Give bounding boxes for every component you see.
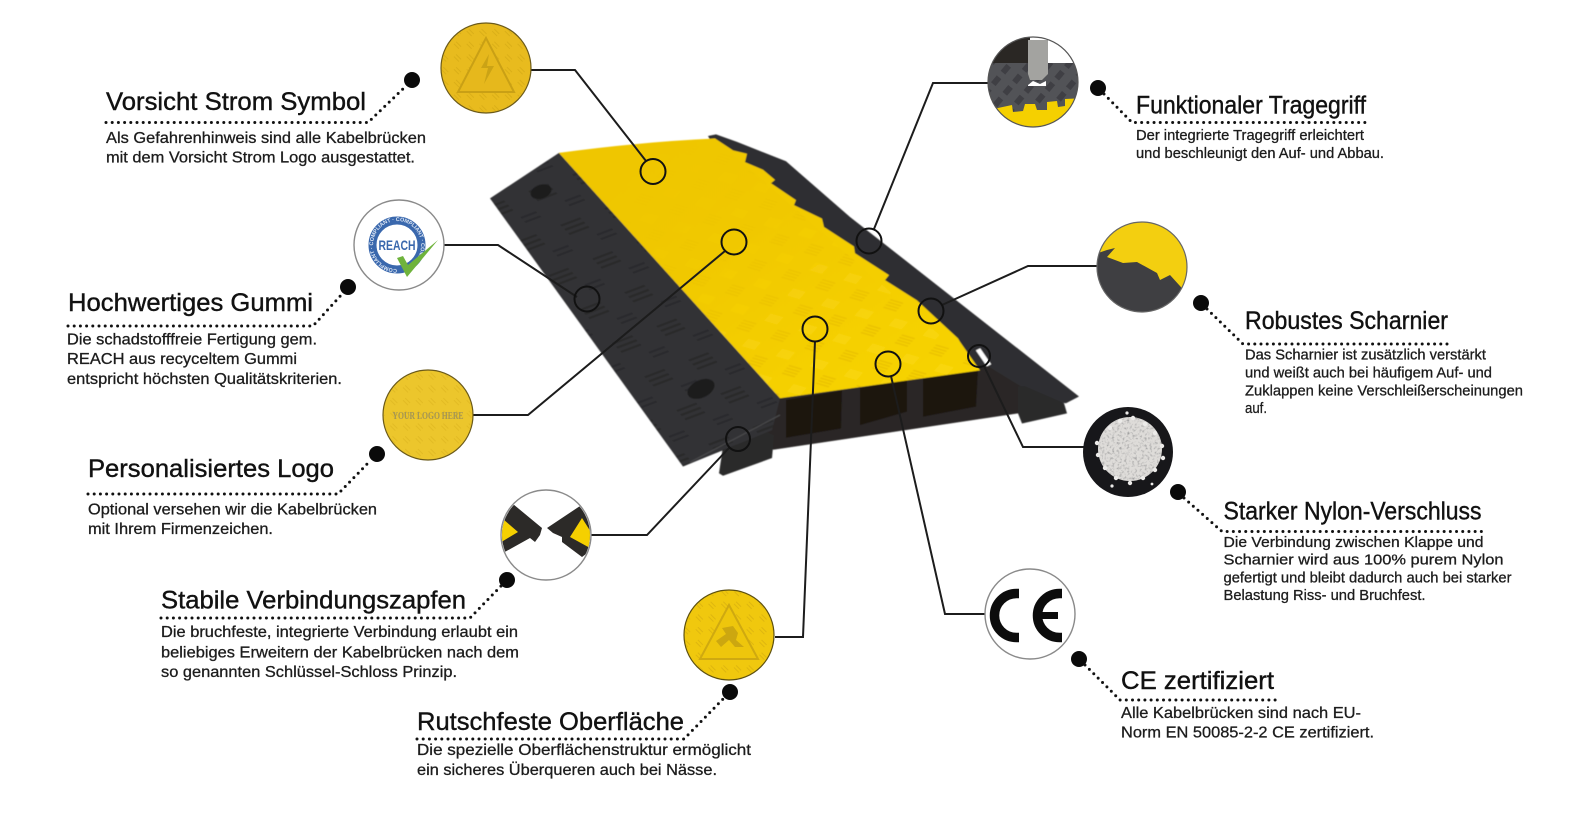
callout: Funktionaler Tragegriff: und beschleunigt den Auf- und Abbau. bbox=[1136, 145, 1384, 162]
callout: Starker Nylon-Verschluss: Scharnier wird aus 100% purem Nylon bbox=[1224, 552, 1504, 568]
callout: CE zertifiziert bbox=[1071, 651, 1374, 742]
callout: Robustes Scharnier: Das Scharnier ist zusätzlich verstärkt bbox=[1245, 346, 1487, 364]
callout: CE zertifiziert: Alle Kabelbrücken sind nach EU- bbox=[1121, 705, 1361, 722]
icon: personalised logo plate: YOUR LOGO HERE bbox=[392, 411, 464, 422]
callout: Vorsicht Strom Symbol: Als Gefahrenhinweis sind alle Kabelbrücken bbox=[106, 130, 426, 147]
far side ramp bbox=[708, 134, 1079, 403]
callout: Rutschfeste Oberfläche: Rutschfeste Oberfläche bbox=[417, 708, 684, 736]
callout: CE zertifiziert: Norm EN 50085-2-2 CE zertifiziert. bbox=[1121, 724, 1374, 742]
yellow cover plate bbox=[559, 139, 980, 398]
callout: Robustes Scharnier: Zuklappen keine Verschleißerscheinungen bbox=[1245, 382, 1523, 400]
callout: Starker Nylon-Verschluss: Belastung Riss- und Bruchfest. bbox=[1224, 587, 1426, 604]
leader: Vorsicht Strom Symbol bbox=[522, 70, 666, 184]
white nylon hinge pin bbox=[978, 349, 989, 365]
callout: Funktionaler Tragegriff bbox=[1090, 80, 1384, 162]
callout: Vorsicht Strom Symbol: mit dem Vorsicht Strom Logo ausgestattet. bbox=[106, 150, 415, 166]
icon: REACH compliant seal bbox=[353, 199, 445, 291]
left connector peg bbox=[719, 427, 774, 476]
icon: REACH compliant seal: REACH bbox=[378, 237, 416, 253]
callout: Vorsicht Strom Symbol: Vorsicht Strom Symbol bbox=[106, 88, 366, 116]
callout: Stabile Verbindungszapfen bbox=[161, 572, 519, 681]
callout: Funktionaler Tragegriff: Der integrierte Tragegriff erleichtert bbox=[1136, 127, 1365, 144]
leader: Funktionaler Tragegriff bbox=[856, 83, 988, 254]
leader: Personalisiertes Logo bbox=[472, 230, 746, 415]
callout: Starker Nylon-Verschluss: Starker Nylon-Verschluss bbox=[1224, 498, 1482, 526]
callout: Funktionaler Tragegriff: Funktionaler Tragegriff bbox=[1136, 92, 1366, 120]
left ramp bbox=[490, 153, 780, 466]
callout: Stabile Verbindungszapfen: so genannten Schlüssel-Schloss Prinzip. bbox=[161, 664, 457, 681]
icon: electric warning symbol bbox=[441, 23, 531, 113]
leader: CE zertifiziert bbox=[876, 352, 985, 614]
callout: Hochwertiges Gummi: entspricht höchsten Qualitätskriterien. bbox=[67, 371, 342, 388]
callout: Personalisiertes Logo bbox=[88, 446, 385, 538]
icon: nylon granulate bbox=[1083, 407, 1173, 497]
callout: Rutschfeste Oberfläche: Die spezielle Oberflächenstruktur ermöglicht bbox=[417, 742, 752, 759]
callout: Stabile Verbindungszapfen: Stabile Verbindungszapfen bbox=[161, 586, 466, 614]
icon: connector pegs bbox=[498, 490, 594, 580]
callout: Stabile Verbindungszapfen: Die bruchfeste, integrierte Verbindung erlaubt ein bbox=[161, 624, 518, 641]
callout: Rutschfeste Oberfläche: ein sicheres Überqueren auch bei Nässe. bbox=[417, 761, 717, 779]
callout: Hochwertiges Gummi: REACH aus recyceltem Gummi bbox=[67, 351, 297, 368]
leader: Robustes Scharnier bbox=[918, 266, 1097, 324]
callout: Stabile Verbindungszapfen: beliebiges Erweitern der Kabelbrücken nach dem bbox=[161, 644, 519, 662]
leader: Stabile Verbindungszapfen bbox=[590, 427, 750, 535]
leader: Hochwertiges Gummi bbox=[444, 245, 600, 312]
callout: Personalisiertes Logo: Personalisiertes Logo bbox=[88, 455, 334, 483]
icon: carrying handle bbox=[987, 36, 1079, 128]
icon: CE mark bbox=[985, 569, 1075, 659]
callout: Hochwertiges Gummi: Die schadstofffreie Fertigung gem. bbox=[67, 332, 317, 348]
callout: Personalisiertes Logo: Optional versehen wir die Kabelbrücken bbox=[88, 502, 377, 518]
callout: Personalisiertes Logo: mit Ihrem Firmenzeichen. bbox=[88, 521, 273, 538]
callout: Starker Nylon-Verschluss: gefertigt und bleibt dadurch auch bei starker bbox=[1224, 570, 1512, 586]
callout: Hochwertiges Gummi bbox=[67, 279, 356, 388]
callout: Robustes Scharnier bbox=[1193, 295, 1523, 417]
callout: Robustes Scharnier: auf. bbox=[1245, 400, 1267, 417]
illustration: cable bridge product bbox=[490, 134, 1079, 476]
callout: Starker Nylon-Verschluss bbox=[1170, 484, 1512, 604]
right connector peg bbox=[1018, 386, 1067, 423]
callout: Rutschfeste Oberfläche bbox=[417, 684, 752, 779]
leader: Starker Nylon-Verschluss bbox=[968, 345, 1084, 447]
callout: Robustes Scharnier: Robustes Scharnier bbox=[1245, 307, 1448, 335]
icon: non-slip surface symbol bbox=[684, 590, 774, 680]
callout: Starker Nylon-Verschluss: Die Verbindung zwischen Klappe und bbox=[1224, 534, 1484, 551]
callout: Vorsicht Strom Symbol bbox=[106, 72, 426, 166]
leader: Rutschfeste Oberfläche bbox=[775, 316, 828, 637]
callout: Robustes Scharnier: und weißt auch bei häufigem Auf- und bbox=[1245, 364, 1492, 382]
callout: CE zertifiziert: CE zertifiziert bbox=[1121, 667, 1274, 695]
callout: Hochwertiges Gummi: Hochwertiges Gummi bbox=[68, 289, 313, 317]
icon: REACH compliant seal: COMPLIANT · COMPLIANT · COMPLIANT · COMPLIANT bbox=[369, 217, 425, 273]
icon: personalised logo plate bbox=[383, 370, 473, 460]
front body with cable channels bbox=[745, 364, 1040, 450]
icon: reinforced hinge bbox=[1095, 220, 1190, 315]
